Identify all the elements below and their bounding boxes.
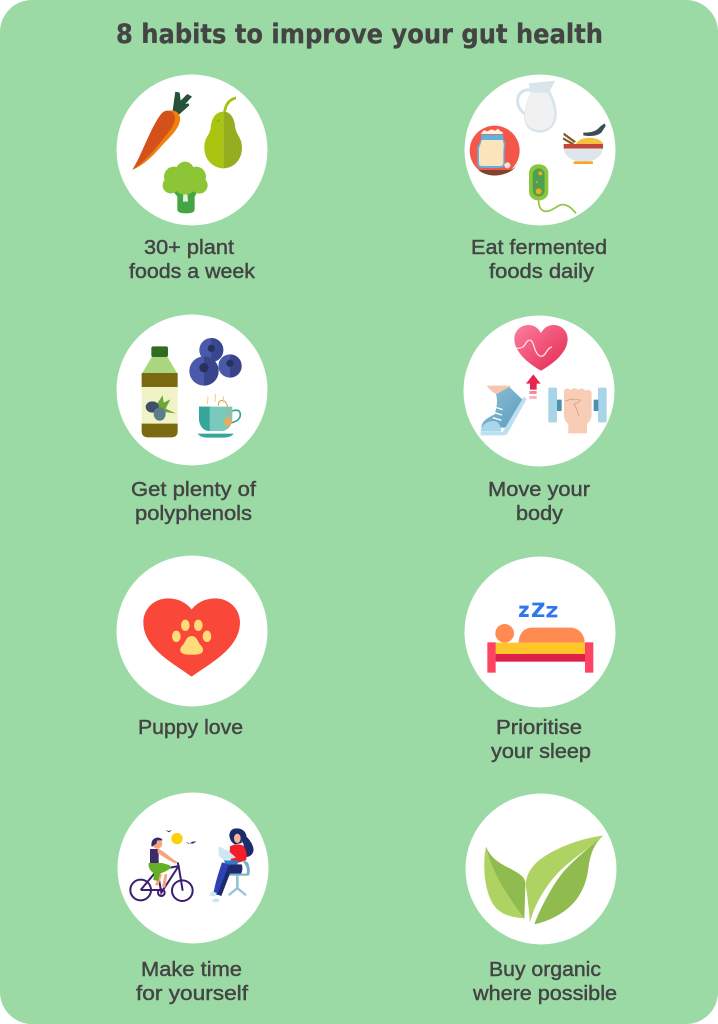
label [129, 236, 256, 283]
icon: two green leaves [484, 836, 603, 924]
label [472, 958, 617, 1005]
label: body [516, 502, 564, 525]
label: Eat fermented [471, 236, 607, 259]
label: Move your [488, 478, 590, 501]
label: 30+ plant [144, 236, 234, 259]
label: polyphenols [135, 502, 252, 525]
label: for yourself [136, 982, 248, 1005]
habit: buy organic where possible [466, 794, 617, 1005]
icon: heart with paw print [143, 598, 240, 677]
habit: 30+ plant foods a week [116, 74, 268, 283]
label [136, 958, 248, 1005]
icon: heart, shoe and dumbbell [481, 325, 607, 435]
label [131, 478, 256, 525]
icon: cyclist and woman reading [130, 828, 254, 902]
label: foods a week [129, 260, 256, 283]
label: Get plenty of [131, 478, 256, 501]
label: Buy organic [489, 958, 601, 981]
title: 8 habits to improve your gut health [116, 19, 603, 50]
label [471, 236, 607, 283]
label: where possible [472, 982, 617, 1005]
habit: prioritise your sleep [464, 556, 616, 763]
label: Prioritise [496, 716, 582, 739]
habit: puppy love [116, 556, 268, 739]
habit: eat fermented foods daily [464, 74, 616, 283]
icon: olive oil, blueberries and tea [142, 338, 242, 438]
icon: carrot, pear and broccoli [132, 92, 242, 213]
habit: get plenty of polyphenols [116, 314, 268, 525]
habit: make time for yourself [118, 792, 268, 1005]
label [491, 716, 591, 763]
icon: person sleeping in bed [487, 603, 593, 673]
habit: move your body [464, 316, 614, 525]
label: your sleep [491, 740, 591, 763]
label: Puppy love [138, 716, 243, 739]
icon: milk jug, jar, noodles and bacterium [470, 81, 606, 213]
label: Make time [141, 958, 242, 981]
label [488, 478, 590, 525]
label: foods daily [489, 260, 595, 283]
